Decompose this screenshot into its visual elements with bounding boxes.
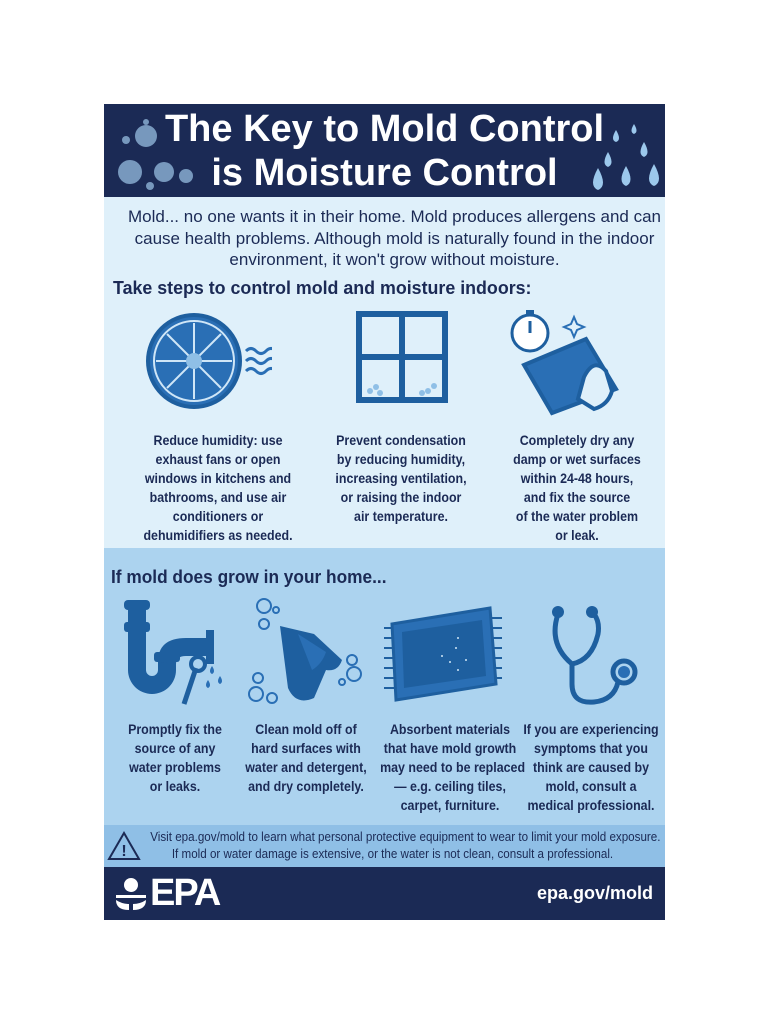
caption 2: air temperature. xyxy=(354,509,448,524)
heading: Take steps to control mold and moisture indoors: xyxy=(113,278,531,298)
caption 3: that have mold growth xyxy=(384,741,516,756)
caption 3: or leak. xyxy=(555,528,599,543)
url: epa.gov/mold xyxy=(537,883,653,903)
caption 3 xyxy=(513,433,641,543)
caption 1: exhaust fans or open xyxy=(156,452,280,467)
caption 2: or raising the indoor xyxy=(341,490,461,505)
panel: prevention xyxy=(104,197,665,548)
EPA logo xyxy=(116,872,220,914)
footer xyxy=(104,867,665,920)
intro text: environment, it won't grow without moisture. xyxy=(229,250,560,269)
caption 1 xyxy=(128,722,222,794)
icon: warning triangle xyxy=(107,831,141,860)
caption 2 xyxy=(335,433,467,524)
caption 2: by reducing humidity, xyxy=(337,452,465,467)
caption 1: bathrooms, and use air xyxy=(150,490,286,505)
icon: warning triangle: ! xyxy=(121,843,127,860)
warning band xyxy=(104,825,665,867)
title xyxy=(165,108,604,194)
caption 1: or leaks. xyxy=(150,779,200,794)
icon: rug xyxy=(384,606,502,702)
caption 2: increasing ventilation, xyxy=(335,471,467,486)
caption 3: — e.g. ceiling tiles, xyxy=(394,779,506,794)
poster xyxy=(104,104,665,920)
caption 1: conditioners or xyxy=(173,509,263,524)
intro text: Mold... no one wants it in their home. Mold produces allergens and can xyxy=(128,207,661,226)
EPA logo: EPA xyxy=(150,872,219,914)
caption 3: may need to be replaced xyxy=(380,760,525,775)
caption 4: symptoms that you xyxy=(534,741,648,756)
caption 1: Reduce humidity: use xyxy=(153,433,283,448)
heading: If mold does grow in your home... xyxy=(111,567,387,587)
intro text xyxy=(128,207,661,269)
icon: timer and wiping cloth xyxy=(510,310,619,416)
header xyxy=(104,104,665,197)
caption 4: think are caused by xyxy=(533,760,649,775)
caption 4 xyxy=(523,722,659,813)
caption 1: water problems xyxy=(129,760,221,775)
caption 2: Prevent condensation xyxy=(336,433,466,448)
caption 1: dehumidifiers as needed. xyxy=(143,528,293,543)
caption 3: Absorbent materials xyxy=(390,722,510,737)
caption 3 xyxy=(380,722,525,813)
caption 1: source of any xyxy=(135,741,215,756)
caption 2: hard surfaces with xyxy=(251,741,361,756)
icon: pipe with wrench xyxy=(124,600,222,705)
caption 1: Promptly fix the xyxy=(128,722,222,737)
title: is Moisture Control xyxy=(211,152,558,194)
icon: fan xyxy=(146,313,272,409)
caption 2: water and detergent, xyxy=(245,760,367,775)
icon: stethoscope xyxy=(552,606,638,705)
icon: window xyxy=(356,311,448,403)
caption 3: damp or wet surfaces xyxy=(513,452,641,467)
caption 1: windows in kitchens and xyxy=(145,471,291,486)
panel: if mold grows xyxy=(104,548,665,825)
intro text: cause health problems. Although mold is naturally found in the indoor xyxy=(135,228,654,248)
caption 4: medical professional. xyxy=(527,798,654,813)
caption 3: within 24-48 hours, xyxy=(521,471,633,486)
caption 3: of the water problem xyxy=(516,509,638,524)
caption 1 xyxy=(143,433,293,543)
caption 4: If you are experiencing xyxy=(523,722,659,737)
icon: drops xyxy=(593,124,659,190)
warning text: If mold or water damage is extensive, or the water is not clean, consult a professional. xyxy=(172,847,613,861)
caption 3: Completely dry any xyxy=(520,433,634,448)
icon: cloth with bubbles xyxy=(248,598,362,704)
icon: bubbles xyxy=(118,119,193,190)
caption 2 xyxy=(245,722,367,794)
warning text: Visit epa.gov/mold to learn what personal protective equipment to wear to limit your mold exposure. xyxy=(150,830,660,844)
caption 4: mold, consult a xyxy=(545,779,637,794)
title: The Key to Mold Control xyxy=(165,108,604,150)
caption 3: carpet, furniture. xyxy=(401,798,499,813)
warning text xyxy=(150,830,660,861)
caption 3: and fix the source xyxy=(524,490,630,505)
caption 2: Clean mold off of xyxy=(255,722,357,737)
caption 2: and dry completely. xyxy=(248,779,364,794)
